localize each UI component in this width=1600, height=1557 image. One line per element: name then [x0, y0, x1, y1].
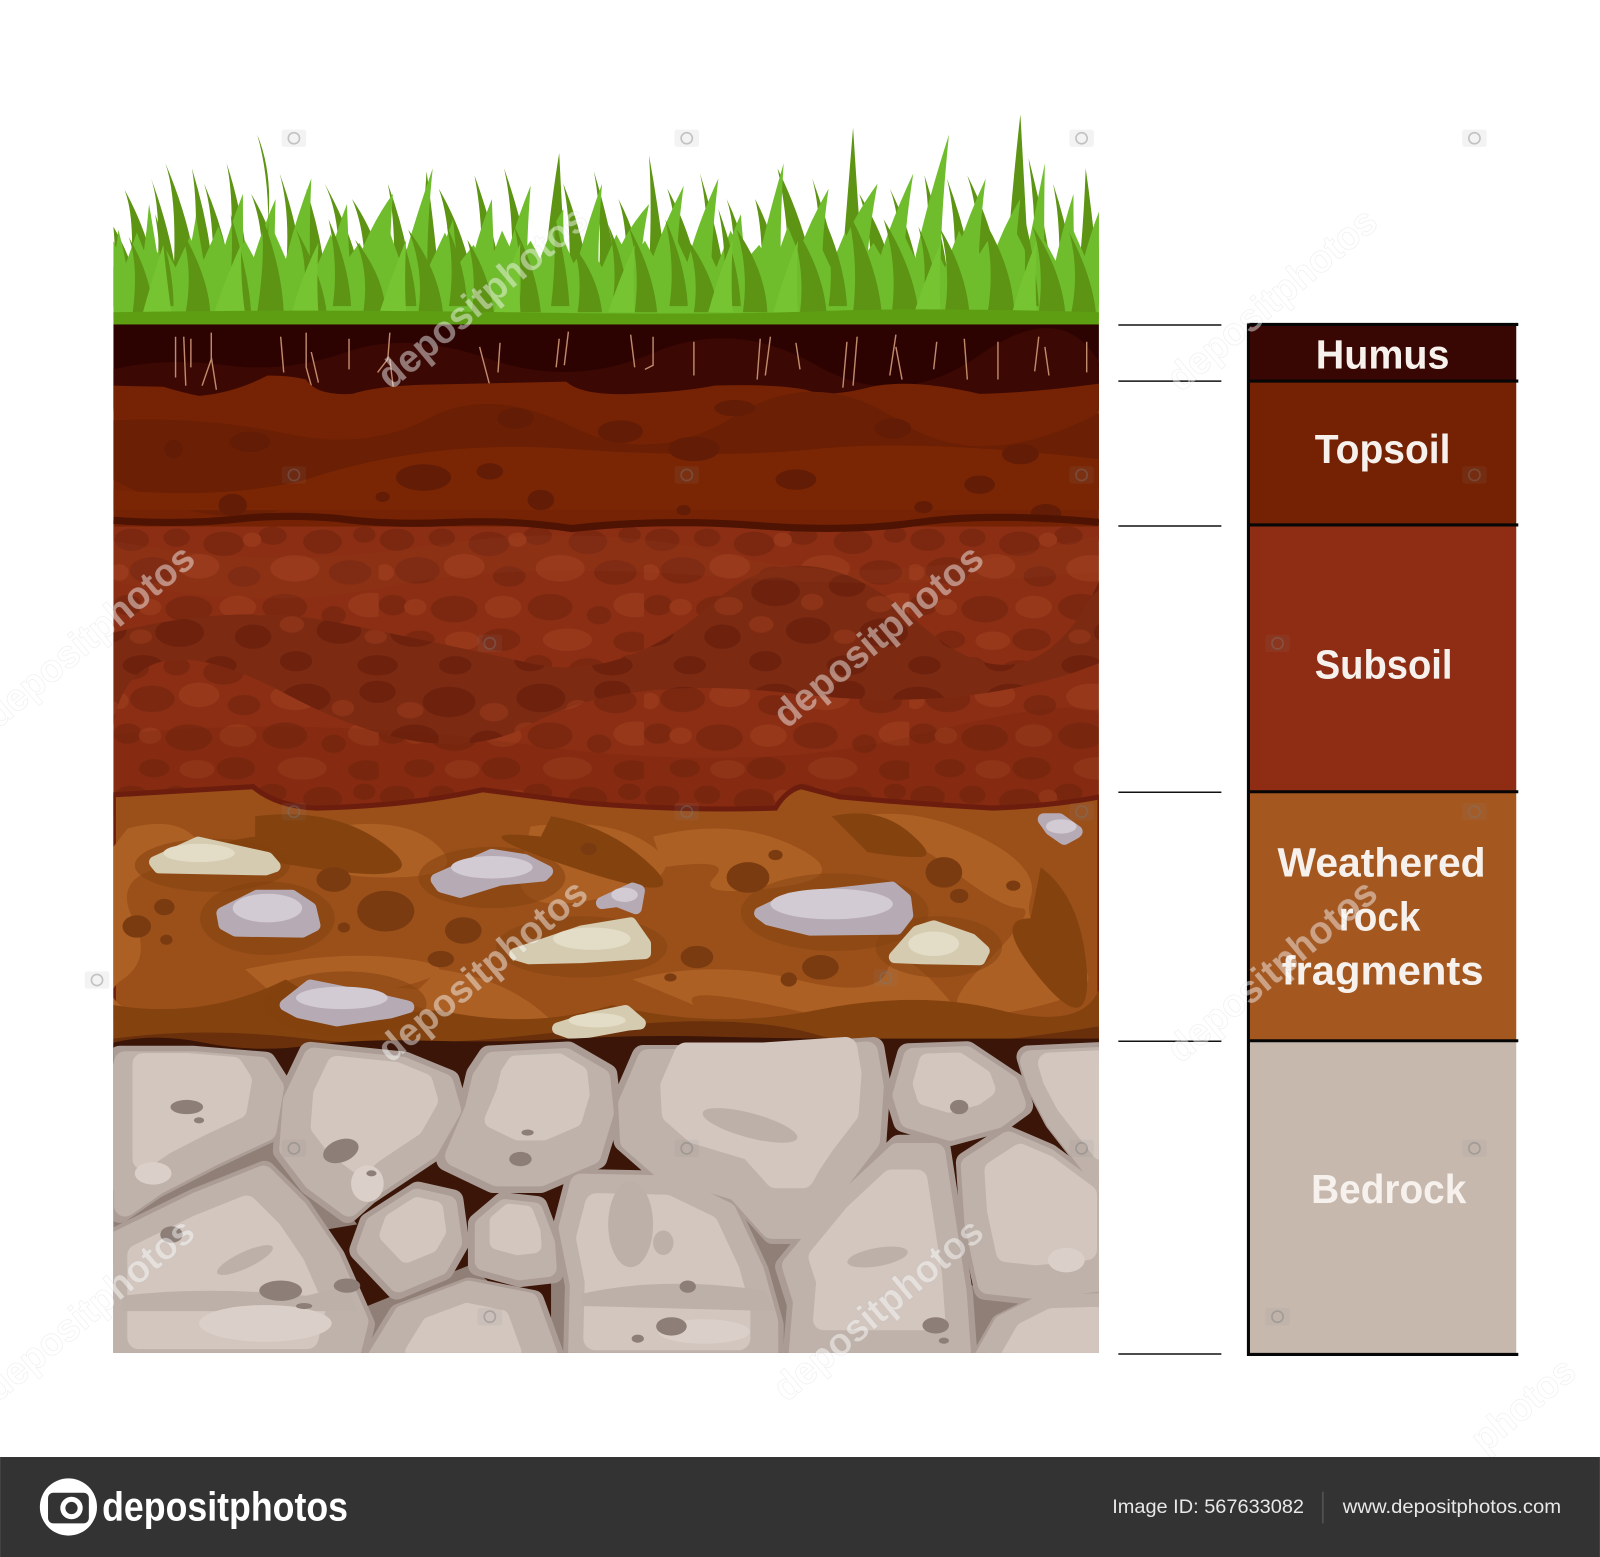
legend: weathered rock fragments: fragments — [1282, 948, 1484, 994]
boulders — [106, 1049, 1111, 1366]
watermark text: depositphotos — [765, 1210, 992, 1410]
legend: humus — [1248, 324, 1516, 381]
layer: grass — [106, 114, 1104, 324]
legend: weathered rock fragments — [1248, 792, 1516, 1041]
legend: weathered rock fragments: Weathered — [1278, 839, 1486, 885]
legend: topsoil: Topsoil — [1315, 426, 1450, 472]
roots in humus — [176, 332, 1087, 393]
watermark text: depositphotos — [369, 871, 596, 1071]
watermark text: photos — [1463, 1349, 1584, 1461]
rock fragments — [155, 819, 1077, 1033]
footer logo icon — [40, 1478, 97, 1536]
legend: subsoil — [1248, 524, 1516, 792]
legend: topsoil — [1248, 381, 1516, 524]
beige stones — [155, 843, 984, 1033]
leader lines — [1118, 325, 1221, 1354]
layer: humus — [113, 324, 1099, 411]
legend: bedrock: Bedrock — [1311, 1166, 1467, 1212]
legend: subsoil: Subsoil — [1315, 642, 1452, 688]
layer: subsoil — [113, 516, 1099, 817]
watermark text: depositphotos — [369, 197, 596, 398]
legend column — [1247, 324, 1518, 1355]
soil cross-section illustration — [102, 114, 1111, 1366]
grey stones — [223, 819, 1077, 1020]
watermark camera icons — [85, 130, 1487, 1325]
legend: bedrock — [1248, 1041, 1516, 1354]
watermark text: depositphotos — [1159, 200, 1386, 400]
legend: weathered rock fragments: rock — [1339, 894, 1421, 940]
footer bar — [0, 1457, 1600, 1557]
halos beneath stones — [135, 839, 290, 892]
grey gaps between boulders — [113, 1142, 1018, 1352]
stone spots — [160, 1100, 968, 1344]
topsoil/subsoil boundary line — [113, 516, 1099, 529]
layer: bedrock — [102, 1036, 1111, 1366]
footer logo text: depositphotos — [102, 1483, 348, 1529]
footer url: www.depositphotos.com — [1342, 1496, 1561, 1518]
watermark text: depositphotos — [765, 536, 992, 736]
watermark text: depositphotos — [1159, 871, 1386, 1071]
legend: humus: Humus — [1316, 331, 1449, 377]
layer: weathered rock fragments — [112, 787, 1100, 1061]
footer image id: Image ID: 567633082 — [1112, 1496, 1304, 1518]
layer: topsoil — [113, 375, 1099, 541]
stone shading — [123, 1101, 909, 1311]
